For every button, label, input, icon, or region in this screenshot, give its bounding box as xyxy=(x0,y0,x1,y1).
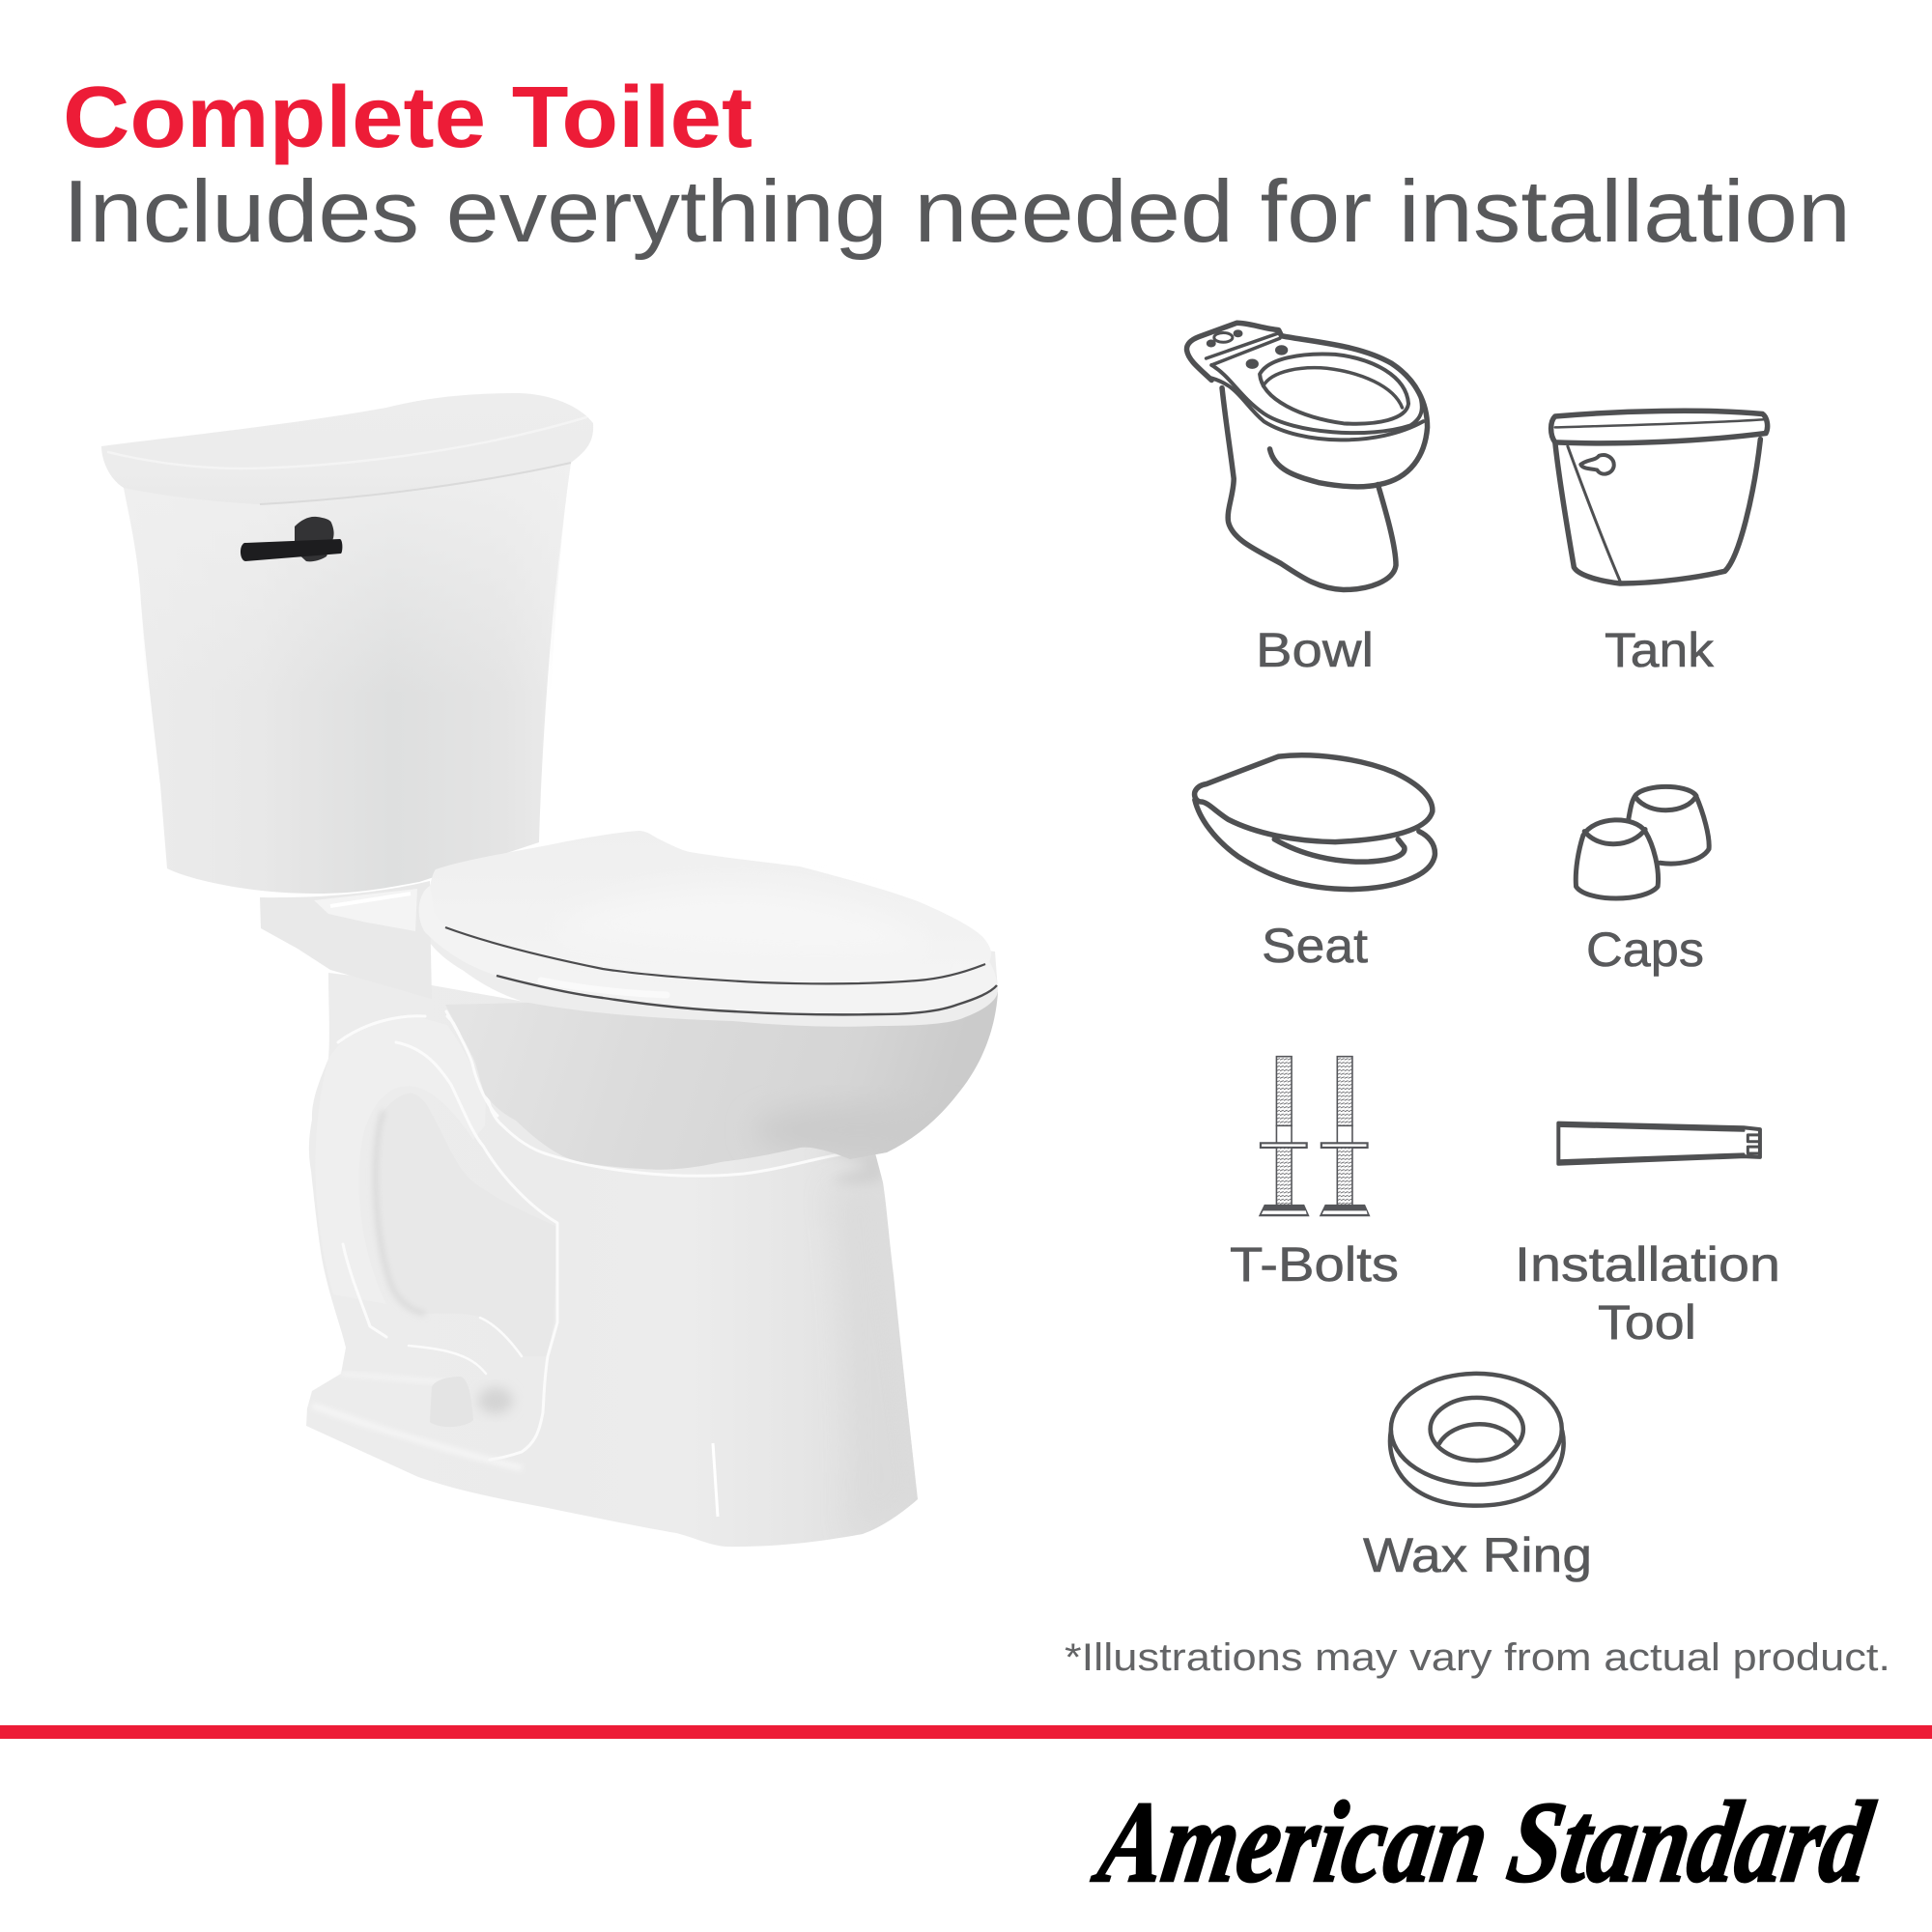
flush handle xyxy=(241,517,342,561)
ring highlight xyxy=(541,980,667,995)
bolt two xyxy=(1321,1057,1369,1215)
icon: installation tool xyxy=(1558,1123,1760,1164)
pedestal side sculpting xyxy=(312,1016,840,1517)
ring gap line xyxy=(497,976,997,1014)
subtitle: Includes everything needed for installation xyxy=(63,163,1851,261)
title: Complete Toilet: Complete Toilet xyxy=(63,70,753,166)
seat ring xyxy=(419,874,997,1014)
seat lid recess xyxy=(551,888,927,956)
recess inner shadow xyxy=(376,1111,425,1314)
raised band xyxy=(315,1016,486,1304)
label: Seat: Seat xyxy=(1262,919,1368,973)
icon: caps xyxy=(1576,786,1709,898)
label: Installation Tool: Installation xyxy=(1515,1237,1780,1292)
label: Wax Ring: Wax Ring xyxy=(1363,1528,1592,1582)
bridge between tank and bowl xyxy=(260,881,432,999)
tank lid xyxy=(101,393,593,504)
bridge recess and highlight xyxy=(314,889,417,931)
lid lower shadow line xyxy=(260,463,571,504)
label: Bowl: Bowl xyxy=(1256,623,1374,677)
floor bolt cap xyxy=(430,1377,473,1427)
product photo: toilet xyxy=(101,393,998,1547)
bolt one xyxy=(1260,1057,1308,1215)
seat lid xyxy=(430,831,991,982)
icon: bowl xyxy=(1187,323,1428,589)
lid ridge highlight xyxy=(108,417,586,469)
toilet bowl xyxy=(445,992,998,1170)
bowl lip band xyxy=(417,886,998,1027)
icon: seat xyxy=(1195,755,1435,890)
foot contour xyxy=(490,1322,557,1460)
tank upper lightening xyxy=(124,463,571,696)
bridge groove xyxy=(330,894,411,906)
label: T-Bolts: T-Bolts xyxy=(1230,1237,1399,1292)
seat gap line xyxy=(445,927,985,983)
side recess panel xyxy=(374,1094,557,1356)
label: Tank: Tank xyxy=(1605,623,1715,677)
icon: tank xyxy=(1551,411,1768,583)
under-bowl shadow xyxy=(831,1153,881,1182)
band highlights xyxy=(396,1042,557,1322)
icon: T-bolts xyxy=(1260,1057,1369,1215)
label: Installation Tool: Tool xyxy=(1598,1295,1696,1350)
label: Installation Tool xyxy=(1515,1237,1780,1350)
tank xyxy=(124,463,571,894)
floor bolt shadow xyxy=(478,1387,513,1414)
footnote: *Illustrations may vary from actual product. xyxy=(1065,1636,1890,1679)
bowl left crease highlight xyxy=(446,1011,497,1116)
pedestal right face shading xyxy=(831,1182,918,1536)
icon: wax ring xyxy=(1390,1374,1564,1506)
label: Caps: Caps xyxy=(1586,923,1704,977)
toilet pedestal xyxy=(306,973,918,1547)
glaze streak xyxy=(713,1443,718,1517)
red divider bar xyxy=(0,1725,1932,1739)
bowl lower-right shadow xyxy=(775,1115,932,1151)
